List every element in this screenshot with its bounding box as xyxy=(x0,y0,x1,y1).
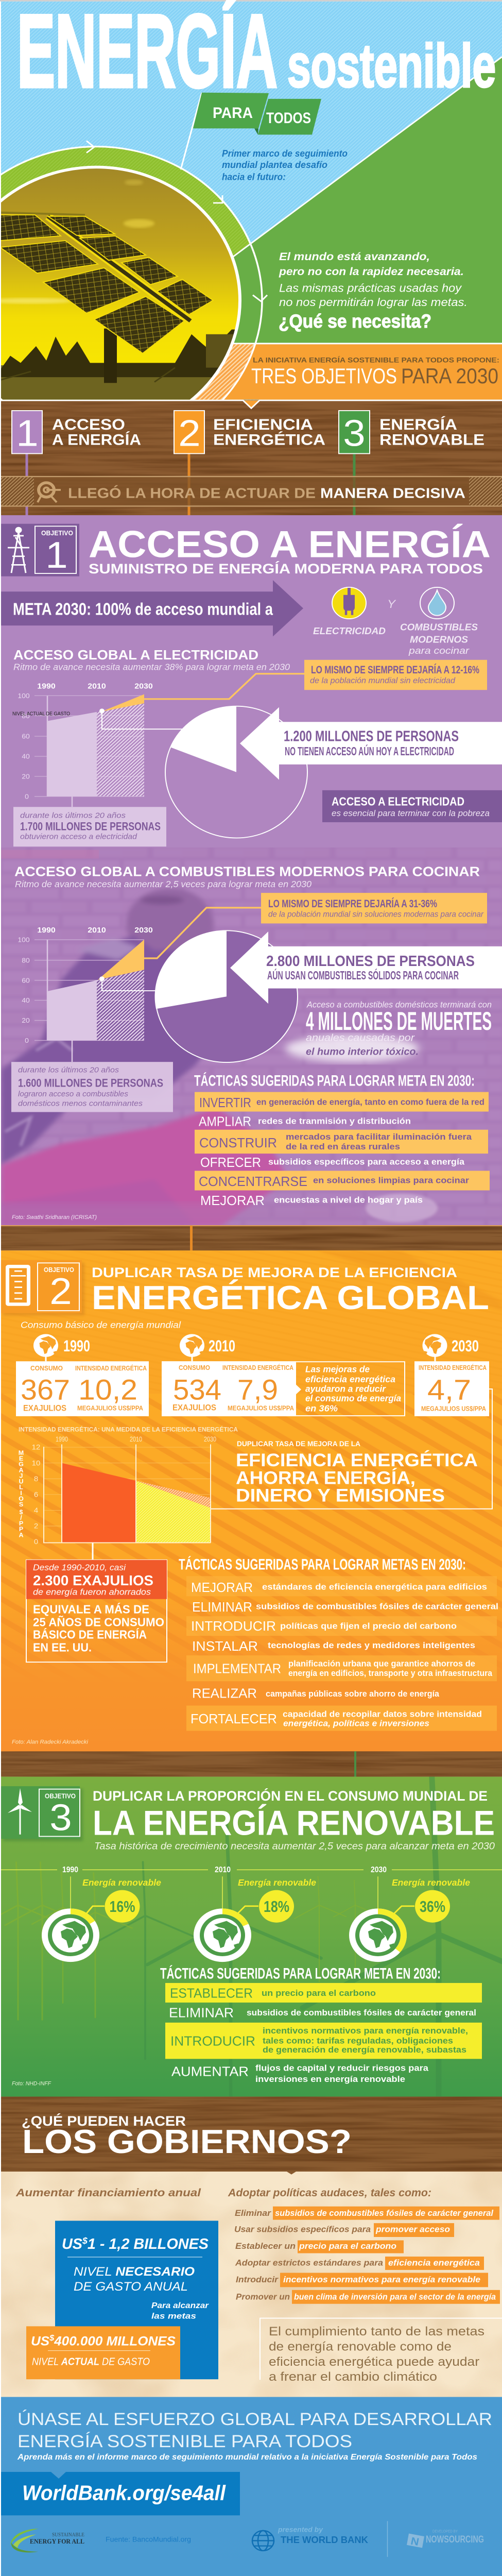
ring arrows xyxy=(86,141,267,301)
icon: target xyxy=(38,483,61,502)
solar panel photo xyxy=(1,145,263,400)
logo: world bank xyxy=(252,2526,368,2551)
panel: objective 2 energy efficiency: INTENSIDAD ENERGÉTICA: UNA MEDIDA DE LA EFICIENCIA ENERGÉTICA xyxy=(19,1426,238,1433)
chart: cooking fuels xyxy=(18,926,157,1062)
objective 3 tile: ENERGÍA xyxy=(379,416,457,433)
tactics: objective 2: subsidios de combustibles fósiles de carácter general xyxy=(256,1601,498,1611)
year 2010 card: 7,9 xyxy=(237,1374,278,1406)
chart: energy intensity: 0 xyxy=(34,1538,38,1546)
hero message: El mundo está avanzando, xyxy=(279,250,430,263)
panel: objective 1 access to energy: Foto: Swathi Sridharan (ICRISAT) xyxy=(12,1214,97,1221)
box: needed spending: 1 - 1,2 BILLONES xyxy=(88,2236,209,2252)
chart: energy intensity: $ xyxy=(20,1509,23,1516)
year 2010 card: ayudaron a reducir xyxy=(305,1383,386,1394)
chart: electricity access: 0 xyxy=(25,793,29,800)
chart: electricity access: 40 xyxy=(22,753,30,760)
panel: objective 3 renewable energy: Foto: NHD-INFF xyxy=(12,2081,51,2087)
tactics: objective 2: ELIMINAR xyxy=(192,1600,252,1615)
photo background: wind turbines xyxy=(1,1776,502,2074)
chart: energy intensity: O xyxy=(19,1495,24,1502)
tactics: objective 2: FORTALECER xyxy=(191,1711,277,1726)
callout: business as usual electricity xyxy=(304,660,487,690)
year 2010 card: el consumo de energía xyxy=(305,1393,401,1403)
objective 2 tile: 2 xyxy=(178,412,201,454)
tactics: objective 3: un precio para el carbono xyxy=(262,1988,376,1998)
timeline xyxy=(1,1865,502,1909)
tactics: objective 3: ESTABLECER xyxy=(170,1986,253,2001)
policy list: incentivos normativos para energía renovable xyxy=(283,2275,480,2284)
chart: electricity access: 20 xyxy=(22,773,30,780)
intro text: mundial plantea desafío xyxy=(222,160,327,171)
year 1990 card: MEGAJULIOS US$/PPA xyxy=(77,1404,144,1412)
year 2030 card: MEGAJULIOS US$/PPA xyxy=(421,1405,487,1413)
tactics: objective 2: energética, políticas e inversiones xyxy=(283,1718,429,1728)
flag: para todos: PARA xyxy=(213,104,253,122)
banner: hora de actuar: MANERA DECISIVA xyxy=(320,486,465,501)
chart: energy intensity: E xyxy=(19,1455,23,1462)
year 1990 card: CONSUMO xyxy=(30,1364,63,1372)
tactics: objective 2: INSTALAR xyxy=(192,1639,258,1654)
target labels xyxy=(313,622,478,656)
chart: cooking fuels: 1990 xyxy=(37,926,56,935)
tactics: objective 2: REALIZAR xyxy=(192,1686,257,1701)
tactics: objective 1: CONCENTRARSE xyxy=(199,1174,307,1189)
objective 3 header xyxy=(1,1786,495,1842)
big arrow: 2.800 millones xyxy=(230,931,502,1004)
chart: energy intensity: 2 xyxy=(34,1522,38,1530)
year 1990 card xyxy=(16,1334,149,1416)
chart: energy intensity: U xyxy=(19,1478,24,1485)
logo: nowsourcing: DEVELOPED BY xyxy=(432,2529,458,2534)
logo: nowsourcing: N xyxy=(410,2535,420,2548)
chart: energy intensity: 6 xyxy=(34,1491,38,1499)
donut: 2030 36%: 36% xyxy=(420,1897,445,1916)
tactics: objective 1: mercados para facilitar iluminación fuera xyxy=(286,1132,472,1142)
box: needed spending: US xyxy=(62,2236,84,2252)
flag: para todos xyxy=(181,93,321,170)
callout: business as usual electricity: de la población mundial sin electricidad xyxy=(310,676,456,685)
box: 2.300 exajulios: 25 AÑOS DE CONSUMO xyxy=(33,1615,164,1629)
box: 1.600 millones xyxy=(11,1062,173,1112)
donut: 2010 18%: Energía renovable xyxy=(238,1877,316,1888)
tactics: objective 2: campañas públicas sobre ahorro de energía xyxy=(266,1688,439,1699)
panel: objective 1 access to energy: Y xyxy=(387,598,396,611)
tactics: objective 1: INVERTIR xyxy=(199,1095,251,1110)
box: needed spending: DE GASTO ANUAL xyxy=(74,2280,188,2294)
tactics: objective 3: AUMENTAR xyxy=(171,2064,249,2079)
chart: electricity access: 100 xyxy=(18,692,30,700)
chart: cooking fuels: 80 xyxy=(22,957,30,964)
hero message: pero no con la rapidez necesaria. xyxy=(279,265,464,278)
box: 1.600 millones: durante los últimos 20 años xyxy=(18,1066,119,1074)
chart: electricity access: 60 xyxy=(22,733,30,740)
box: 1.600 millones: domésticos menos contaminantes xyxy=(18,1099,143,1108)
panel: government actions: Adoptar políticas audaces, tales como: xyxy=(228,2187,431,2199)
chart: energy intensity: P xyxy=(19,1526,23,1533)
panel: objective 2 energy efficiency: Consumo básico de energía mundial xyxy=(21,1319,181,1330)
timeline: 2010 xyxy=(215,1865,231,1874)
chart: energy intensity: L xyxy=(19,1484,23,1491)
statement: efficiency saves: DINERO Y EMISIONES xyxy=(236,1485,445,1505)
wood band: three objectives xyxy=(1,400,502,515)
logo: sustainable energy for all xyxy=(10,2529,84,2552)
chart: electricity access: 80 xyxy=(22,712,30,720)
statement: efficiency saves: AHORRA ENERGÍA, xyxy=(236,1468,416,1488)
tactics: objective 1: de la red en áreas rurales xyxy=(286,1141,400,1151)
policy list xyxy=(234,2207,500,2304)
objective 3 header: 3 xyxy=(49,1797,72,1838)
chart: electricity access: 2030 xyxy=(134,682,153,690)
chart: cooking fuels: 60 xyxy=(22,977,30,984)
chart: energy intensity: G xyxy=(19,1461,24,1468)
panel: call to action: Fuente: BancoMundial.org xyxy=(106,2536,191,2544)
year 1990 card: 367 xyxy=(21,1374,70,1406)
hero message: Las mismas prácticas usadas hoy xyxy=(279,281,462,294)
box: 2.300 exajulios: 2.300 EXAJULIOS xyxy=(33,1573,153,1589)
box: 1.700 millones: 1.700 MILLONES DE PERSONAS xyxy=(20,820,161,833)
climate statement: eficiencia energética puede ayudar xyxy=(269,2355,479,2369)
chart: cooking fuels: 20 xyxy=(22,1017,30,1024)
box: 1.700 millones: obtuvieron acceso a electricidad xyxy=(20,833,137,841)
panel: government actions xyxy=(1,2172,502,2397)
box: 2.300 exajulios: BÁSICO DE ENERGÍA xyxy=(33,1628,147,1641)
tactics: objective 1: OFRECER xyxy=(200,1155,261,1170)
heading: electricity access: ACCESO GLOBAL A ELECTRICIDAD xyxy=(13,648,258,663)
chart: cooking fuels: 100 xyxy=(18,936,30,943)
chart: energy intensity: P xyxy=(19,1520,23,1527)
box: 2.300 exajulios: EQUIVALE A MÁS DE xyxy=(33,1602,149,1616)
chart: energy intensity: A xyxy=(19,1532,24,1538)
tactics: objective 1: AMPLIAR xyxy=(199,1114,251,1129)
hero panel xyxy=(0,0,502,400)
panel: objective 3 renewable energy xyxy=(0,1777,502,2354)
chart: electricity access: 1990 xyxy=(37,682,56,690)
tactics: objective 2: estándares de eficiencia energética para edificios xyxy=(262,1582,487,1591)
intro text xyxy=(222,149,348,182)
target labels: para cocinar xyxy=(408,646,470,656)
tactics: objective 1: MEJORAR xyxy=(200,1193,265,1208)
target labels: MODERNOS xyxy=(410,635,468,645)
donut: 1990 16% xyxy=(45,1877,161,1959)
objective 2 header: OBJETIVO xyxy=(44,1266,74,1274)
box: current spending: 400.000 MILLONES xyxy=(54,2333,176,2348)
year 2030 card: 4,7 xyxy=(427,1374,471,1406)
chart: electricity access: 2010 xyxy=(88,682,106,690)
policy list: Eliminar xyxy=(235,2208,271,2218)
flag: para todos: TODOS xyxy=(266,109,311,127)
heading panel: what can governments do: ¿QUÉ PUEDEN HACER xyxy=(22,2113,186,2129)
objective 3 tile xyxy=(339,411,484,454)
timeline: 2030 xyxy=(371,1865,387,1874)
climate statement: El cumplimiento tanto de las metas xyxy=(269,2325,484,2338)
box: 1.700 millones xyxy=(13,807,166,846)
donut: 2030 36% xyxy=(352,1877,470,1959)
tactics: objective 1: en generación de energía, tanto en como fuera de la red xyxy=(256,1097,484,1107)
logo: sustainable energy for all: ENERGY FOR ALL xyxy=(30,2537,84,2545)
chart: energy intensity: / xyxy=(20,1514,22,1521)
box: needed spending: NIVEL NECESARIO xyxy=(74,2265,195,2279)
year 2010 card: CONSUMO xyxy=(179,1364,210,1371)
chart: energy intensity: 8 xyxy=(34,1475,38,1483)
policy list: precio para el carbono xyxy=(299,2241,396,2251)
statement: efficiency saves: EFICIENCIA ENERGÉTICA xyxy=(236,1450,478,1470)
objective 1 header: SUMINISTRO DE ENERGÍA MODERNA PARA TODOS xyxy=(89,561,483,577)
box: 2.300 exajulios: EN EE. UU. xyxy=(33,1641,92,1655)
chart: energy intensity: J xyxy=(20,1472,23,1479)
logo: world bank: THE WORLD BANK xyxy=(281,2535,368,2546)
donut: 1990 16%: 16% xyxy=(109,1897,135,1916)
statement: efficiency saves xyxy=(236,1440,478,1505)
objective 2 header: 2 xyxy=(49,1270,72,1312)
climate statement xyxy=(260,2318,502,2384)
chart: energy intensity: 2030 xyxy=(204,1435,216,1444)
tactics: objective 3 xyxy=(160,1965,482,2084)
policy list: Promover un xyxy=(236,2292,290,2301)
year 2010 card: INTENSIDAD ENERGÉTICA xyxy=(222,1364,293,1371)
objective 2 tile xyxy=(174,411,325,454)
box: 2.300 exajulios: de energía fueron ahorrados xyxy=(33,1587,151,1597)
policy list: Usar subsidios específicos para xyxy=(234,2224,371,2234)
logo: sustainable energy for all: SUSTAINABLE xyxy=(52,2532,84,2538)
year 2010 card: 534 xyxy=(173,1374,221,1406)
box: needed spending xyxy=(55,2221,218,2379)
objective 1 header: 1 xyxy=(45,534,68,575)
objective 2 header: DUPLICAR TASA DE MEJORA DE LA EFICIENCIA xyxy=(92,1265,457,1280)
objective 3 tile: RENOVABLE xyxy=(379,431,484,448)
banner: hora de actuar xyxy=(1,476,502,506)
tactics: objective 2: INTRODUCIR xyxy=(191,1619,276,1634)
chart: energy intensity: 1990 xyxy=(56,1435,68,1444)
box: 2.300 exajulios xyxy=(26,1560,167,1662)
tactics: objective 1: CONSTRUIR xyxy=(199,1136,277,1150)
chart: energy intensity: I xyxy=(20,1489,22,1497)
heading panel: what can governments do xyxy=(1,2097,502,2172)
donut: 2030 36%: Energía renovable xyxy=(392,1877,470,1888)
callout: business as usual cooking xyxy=(261,893,487,923)
photo background: woman cooking xyxy=(1,848,502,1226)
box: current spending: $ xyxy=(49,2334,55,2343)
policy list: Establecer un xyxy=(235,2241,296,2251)
tactics: objective 3: inversiones en energía renovable xyxy=(255,2074,405,2084)
wood divider 2 xyxy=(1,1751,502,1777)
tactics: objective 2: MEJORAR xyxy=(191,1580,253,1595)
objective 2 header xyxy=(1,1260,489,1317)
policy list: eficiencia energética xyxy=(388,2258,480,2267)
box: 2.300 exajulios: Desde 1990-2010, casi xyxy=(33,1563,126,1572)
objective 1 header xyxy=(1,523,491,577)
box: current spending xyxy=(26,2326,180,2379)
smoke deaths statement xyxy=(285,999,492,1062)
logo: nowsourcing xyxy=(407,2529,484,2548)
climate statement: de energía renovable como de xyxy=(269,2340,452,2353)
donut: 2010 18%: 18% xyxy=(264,1897,289,1916)
box: current spending: US xyxy=(31,2333,50,2348)
intro text: hacia el futuro: xyxy=(222,172,286,182)
tactics: objective 1: redes de tranmisión y distribución xyxy=(258,1116,411,1126)
target labels: ELECTRICIDAD xyxy=(313,626,386,637)
icon: fuel drop xyxy=(420,587,454,619)
tactics: objective 3: tales como: tarifas reguladas, obligaciones xyxy=(263,2036,453,2045)
chart: cooking fuels: 40 xyxy=(22,997,30,1004)
year 2010 card: eficiencia energética xyxy=(305,1374,395,1384)
heading: electricity access xyxy=(13,648,290,672)
climate statement: a frenar el cambio climático xyxy=(269,2370,437,2384)
objective 1 header: ACCESO A ENERGÍA xyxy=(89,523,491,566)
hero message: no nos permitirán lograr las metas. xyxy=(279,296,468,309)
target labels: COMBUSTIBLES xyxy=(400,622,478,633)
panel: objective 1 access to energy xyxy=(1,515,502,1226)
smoke deaths statement: anuales causadas por xyxy=(306,1032,415,1043)
tactics: objective 3: subsidios de combustibles fósiles de carácter general xyxy=(247,2008,476,2018)
panel: objective 2 energy efficiency xyxy=(1,1250,502,1751)
policy list: promover acceso xyxy=(375,2224,450,2234)
tactics: objective 2: tecnologías de redes y medidores inteligentes xyxy=(268,1640,475,1650)
box: electricity ends poverty: es esencial para terminar con la pobreza xyxy=(332,808,490,818)
chart: cooking fuels: 2010 xyxy=(88,926,106,935)
year 2030 card: 2030 xyxy=(452,1336,479,1355)
box: 1.700 millones: durante los últimos 20 años xyxy=(20,811,126,820)
objective 3 header: OBJETIVO xyxy=(45,1792,76,1800)
big arrow: 1.200 millones xyxy=(240,707,502,779)
tactics: objective 1: subsidios específicos para acceso a energía xyxy=(268,1157,464,1166)
box: electricity ends poverty xyxy=(322,790,502,822)
orange objectives band: TRES OBJETIVOS xyxy=(251,365,397,388)
donut: 2010 18% xyxy=(197,1877,316,1959)
objective 1 tile: A ENERGÍA xyxy=(52,431,141,448)
heading: electricity access: Ritmo de avance necesita aumentar 38% para lograr meta en 2030 xyxy=(13,662,290,672)
year 2010 card: en 36% xyxy=(305,1403,338,1413)
year 2010 card: EXAJULIOS xyxy=(172,1402,216,1413)
orange objectives band xyxy=(154,344,502,400)
donut: 1990 16%: Energía renovable xyxy=(82,1877,161,1888)
tactics: objective 2: capacidad de recopilar datos sobre intensidad xyxy=(283,1709,482,1719)
objective 1 header: OBJETIVO xyxy=(41,529,73,537)
box: 1.600 millones: lograron acceso a combustibles xyxy=(18,1090,128,1098)
hero message xyxy=(279,250,468,332)
tactics: objective 1 xyxy=(194,1072,490,1208)
tactics: objective 3: flujos de capital y reducir riesgos para xyxy=(255,2063,428,2073)
year 1990 card: EXAJULIOS xyxy=(23,1403,66,1413)
chart: energy intensity: A xyxy=(19,1467,24,1473)
icon: power tower xyxy=(8,528,29,573)
chart: cooking fuels: 2030 xyxy=(134,926,153,935)
icon: appliance xyxy=(6,1265,30,1306)
box: electricity ends poverty: ACCESO A ELECTRICIDAD xyxy=(332,795,464,808)
tactics: objective 2: políticas que fijen el precio del carbono xyxy=(280,1621,457,1631)
smoke deaths statement: el humo interior tóxico. xyxy=(306,1046,419,1057)
panel: call to action xyxy=(1,2397,502,2576)
tactics: objective 1: encuestas a nivel de hogar y país xyxy=(274,1195,423,1205)
panel: call to action: ENERGÍA SOSTENIBLE PARA TODOS xyxy=(18,2431,352,2451)
heading panel: what can governments do: LOS GOBIERNOS? xyxy=(22,2123,352,2160)
objective 1 tile: ACCESO xyxy=(52,416,125,433)
tactics: objective 3: ELIMINAR xyxy=(169,2006,234,2020)
box: needed spending: $ xyxy=(82,2235,88,2246)
goal arrow: META 2030: 100% de acceso mundial a xyxy=(13,600,273,619)
icon: electric plug xyxy=(332,587,366,619)
timeline: 1990 xyxy=(62,1865,78,1874)
tactics: objective 3: incentivos normativos para energía renovable, xyxy=(263,2026,468,2036)
goal arrow xyxy=(1,580,303,636)
pie chart: cooking xyxy=(155,930,298,1062)
tactics: objective 3: INTRODUCIR xyxy=(170,2033,255,2048)
tactics: objective 2: planificación urbana que garantice ahorros de xyxy=(288,1658,475,1668)
tactics: objective 2: IMPLEMENTAR xyxy=(193,1661,281,1676)
year 2010 card: 2010 xyxy=(209,1336,235,1355)
chart: energy intensity: 12 xyxy=(32,1444,40,1452)
hero message: ¿Qué se necesita? xyxy=(279,311,431,332)
year 2030 card xyxy=(414,1334,489,1416)
logo: world bank: presented by xyxy=(278,2526,323,2534)
link box xyxy=(1,2472,240,2515)
banner: hora de actuar: LLEGÓ LA HORA DE ACTUAR DE xyxy=(68,485,316,501)
link box: WorldBank.org/se4all xyxy=(22,2481,226,2504)
chart: energy intensity: M xyxy=(19,1449,24,1456)
tactics: objective 1: en soluciones limpias para cocinar xyxy=(313,1175,469,1185)
pie chart: electricity xyxy=(165,706,307,838)
objective 1 tile xyxy=(12,411,141,454)
year 1990 card: INTENSIDAD ENERGÉTICA xyxy=(75,1364,147,1372)
objective 2 tile: ENERGÉTICA xyxy=(213,431,325,448)
heading: cooking fuels access xyxy=(14,865,480,889)
statement: efficiency saves: DUPLICAR TASA DE MEJORA DE LA xyxy=(237,1440,361,1448)
policy list: Adoptar estrictos estándares para xyxy=(235,2258,383,2267)
box: 1.600 millones: 1.600 MILLONES DE PERSONAS xyxy=(18,1076,163,1089)
policy list: Introducir xyxy=(236,2275,279,2284)
panel: objective 3 renewable energy: Tasa histórica de crecimiento necesita aumentar 2,5 veces para alcanzar meta en 2030 xyxy=(94,1841,495,1852)
objective 2 tile: EFICIENCIA xyxy=(213,416,313,433)
chart: energy intensity: 2010 xyxy=(130,1435,142,1444)
heading: cooking fuels access: ACCESO GLOBAL A COMBUSTIBLES MODERNOS PARA COCINAR xyxy=(14,865,480,879)
chart: electricity access xyxy=(12,682,182,807)
icon: wind turbine xyxy=(8,1788,32,1835)
year 1990 card: 10,2 xyxy=(78,1374,137,1406)
box: needed spending: las metas xyxy=(151,2312,196,2320)
chart: energy intensity xyxy=(19,1435,216,1560)
objective 2 header: ENERGÉTICA GLOBAL xyxy=(92,1280,489,1317)
orange objectives band: LA INICIATIVA ENERGÍA SOSTENIBLE PARA TODOS PROPONE: xyxy=(253,356,499,364)
year 2010 card: MEGAJULIOS US$/PPA xyxy=(228,1404,295,1412)
box: needed spending: Para alcanzar xyxy=(151,2301,210,2310)
panel: call to action: Aprenda más en el informe marco de seguimiento mundial relativo a la iniciativa Energía Sostenible para Todos xyxy=(17,2453,477,2462)
wood divider 1 xyxy=(1,1225,502,1250)
panel: call to action: ÚNASE AL ESFUERZO GLOBAL PARA DESARROLLAR xyxy=(18,2409,492,2429)
objective 3 tile: 3 xyxy=(343,412,366,454)
tactics: objective 2 xyxy=(179,1555,498,1731)
year 1990 card: 1990 xyxy=(63,1336,90,1355)
year 2010 card: Las mejoras de xyxy=(305,1364,370,1374)
intro text: Primer marco de seguimiento xyxy=(222,149,348,159)
year 2010 card xyxy=(162,1334,405,1416)
tactics: objective 3: de generación de energía renovable, subastas xyxy=(263,2045,466,2055)
panel: government actions: Aumentar financiamiento anual xyxy=(15,2187,201,2199)
panel: objective 2 energy efficiency: Foto: Alan Radecki Akradecki xyxy=(12,1739,88,1745)
box: current spending: NIVEL ACTUAL DE GASTO xyxy=(32,2356,150,2367)
chart: electricity access: NIVEL ACTUAL DE GASTO xyxy=(12,711,70,717)
chart: cooking fuels: 0 xyxy=(25,1037,29,1044)
chart: energy intensity: 4 xyxy=(34,1507,38,1515)
objective 1 tile: 1 xyxy=(16,412,39,454)
heading: cooking fuels access: Ritmo de avance necesita aumentar 2,5 veces para lograr meta en 2030 xyxy=(15,879,312,889)
chart: energy intensity: 10 xyxy=(32,1460,40,1467)
chart: energy intensity: S xyxy=(19,1501,23,1508)
